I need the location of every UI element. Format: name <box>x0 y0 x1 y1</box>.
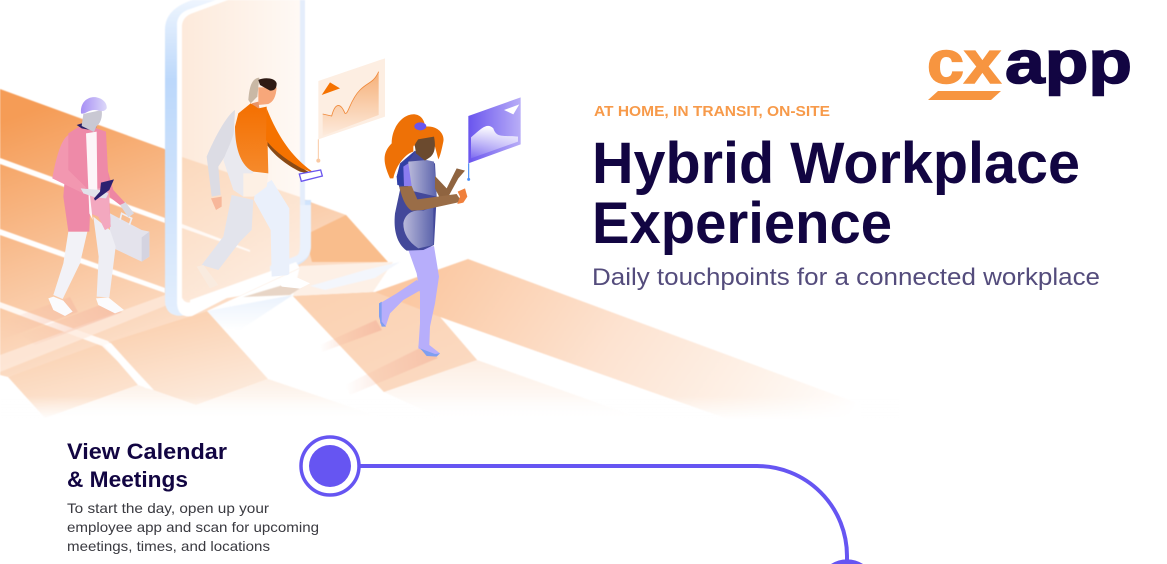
step description: To start the day, open up your <box>67 500 269 516</box>
step heading <box>67 439 227 492</box>
timeline connector <box>358 466 847 561</box>
door frame with interior <box>165 0 311 316</box>
eyebrow label: AT HOME, IN TRANSIT, ON-SITE <box>594 104 830 120</box>
step heading: & Meetings <box>67 467 188 492</box>
title: Hybrid Workplace <box>592 131 1080 196</box>
step description: employee app and scan for upcoming <box>67 519 319 535</box>
title: Experience <box>592 191 892 256</box>
figure: orange chart card with pole <box>299 58 385 181</box>
step description: meetings, times, and locations <box>67 538 270 554</box>
floor illustration <box>0 89 900 420</box>
figure: woman with orange hair <box>379 114 467 357</box>
subtitle: Daily touchpoints for a connected workplace <box>592 264 1100 291</box>
timeline node: next step <box>831 559 863 564</box>
timeline node: first step <box>301 437 359 495</box>
figure: man walking through door <box>197 78 315 289</box>
step description <box>67 500 319 554</box>
figure: purple chart card with pole <box>467 97 521 181</box>
step heading: View Calendar <box>67 439 227 464</box>
figure: man with briefcase <box>48 97 149 316</box>
logo: cxapp: app <box>1005 29 1132 96</box>
title <box>592 131 1080 256</box>
logo: cxapp <box>927 29 1132 100</box>
logo: cxapp: cx <box>927 29 1001 96</box>
